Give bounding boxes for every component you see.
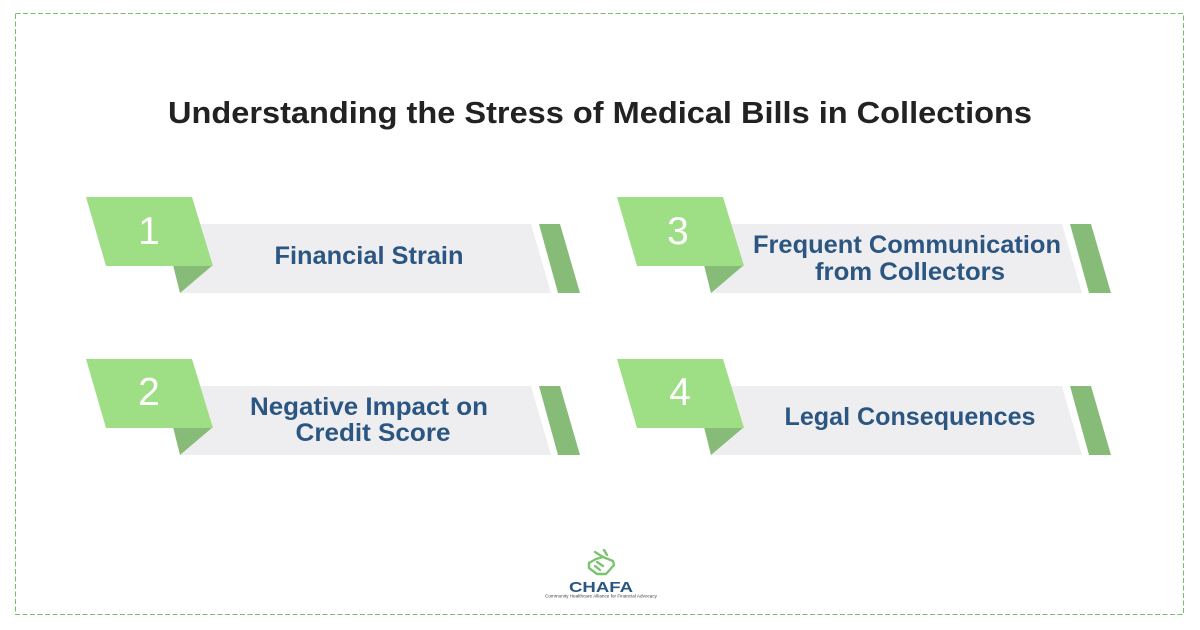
end tab <box>1070 224 1111 293</box>
number flag <box>617 359 744 428</box>
label: Legal Consequences <box>784 403 1036 431</box>
number flag <box>617 197 744 266</box>
end tab <box>539 224 580 293</box>
panel: Legal Consequences <box>617 359 1111 455</box>
fold <box>173 265 213 293</box>
fold <box>173 427 213 455</box>
icon: handshake <box>589 550 614 574</box>
wordmark: CHAFA <box>569 579 633 596</box>
number: 4 <box>669 371 691 414</box>
fold <box>704 265 744 293</box>
label band <box>180 224 551 293</box>
number: 2 <box>138 371 160 414</box>
panel: Frequent Communication from Collectors: from Collectors <box>815 258 1005 286</box>
label band <box>180 386 551 455</box>
number flag <box>86 197 213 266</box>
label: Frequent Communication <box>753 231 1061 259</box>
label band <box>711 386 1082 455</box>
number flag <box>86 359 213 428</box>
number: 1 <box>138 210 160 253</box>
fold <box>704 427 744 455</box>
end tab <box>1070 386 1111 455</box>
panel: Financial Strain <box>86 197 580 293</box>
tagline: Community Healthcare Alliance for Financial Advocacy <box>545 594 658 598</box>
logo: CHAFA <box>545 550 658 598</box>
label: Financial Strain <box>274 242 464 270</box>
end tab <box>539 386 580 455</box>
panel: Negative Impact on Credit Score <box>86 359 580 455</box>
panel: Negative Impact on Credit Score: Credit Score <box>296 419 451 447</box>
number: 3 <box>667 210 689 253</box>
panel: Frequent Communication from Collectors <box>617 197 1111 293</box>
title: Understanding the Stress of Medical Bills in Collections <box>168 95 1032 130</box>
label: Negative Impact on <box>250 393 488 421</box>
label band <box>711 224 1082 293</box>
